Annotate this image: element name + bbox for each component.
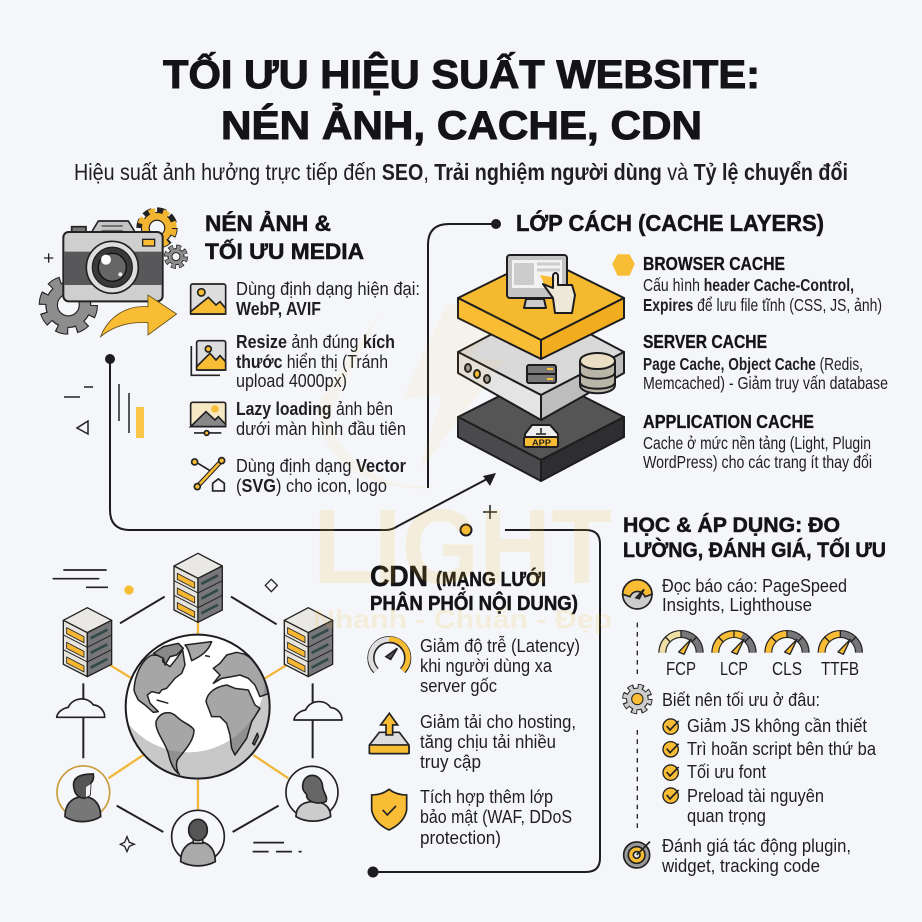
decorative marks: motion lines <box>64 384 144 438</box>
text: CDN list: khi người dùng xa <box>420 656 553 676</box>
title: NÉN ẢNH, CACHE, CDN <box>221 102 702 148</box>
text: CDN list: server gốc <box>420 676 497 696</box>
heading: learn and apply: HỌC & ÁP DỤNG: ĐO <box>623 512 840 537</box>
text: learn list: Giảm JS không cần thiết <box>687 716 867 736</box>
gear: small grey <box>166 246 186 267</box>
icon: target <box>624 842 650 868</box>
text: CDN list: bảo mật (WAF, DDoS <box>420 807 572 827</box>
text: media list <box>236 279 420 496</box>
heading: learn and apply <box>623 512 886 562</box>
layer: application <box>458 375 624 481</box>
gauges <box>662 630 859 654</box>
users <box>57 766 338 866</box>
text: media list: Lazy loading ảnh bên <box>236 399 393 419</box>
title <box>163 51 760 148</box>
text: media list: WebP, AVIF <box>236 299 321 319</box>
text: cache layers: Cache ở mức nền tảng (Light, Plugin <box>643 433 871 453</box>
text: media list: upload 4000px) <box>236 371 347 391</box>
panel: CDN icons <box>369 639 409 830</box>
heading: image compression: TỐI ƯU MEDIA <box>205 238 364 264</box>
chart: isometric cache stack <box>458 255 624 481</box>
text: media list: Dùng định dạng hiện đại: <box>236 279 420 299</box>
text: cache layers: SERVER CACHE <box>643 332 767 352</box>
text: CDN list: Giảm độ trễ (Latency) <box>420 635 580 656</box>
heading: CDN: PHÂN PHỐI NỘI DUNG) <box>370 591 578 615</box>
text: learn list: FCP <box>666 659 696 679</box>
text: cache layers: APPLICATION CACHE <box>643 412 814 432</box>
gear: yellow <box>139 210 175 246</box>
text: cache layers: Cấu hình header Cache-Control, <box>643 275 854 295</box>
diagram: CDN network <box>53 553 342 866</box>
heading: image compression: NÉN ẢNH & <box>205 211 331 236</box>
text: CDN list <box>420 635 580 848</box>
checks <box>663 719 679 803</box>
text: learn list <box>661 576 877 876</box>
layer: server <box>458 308 624 420</box>
text: media list: dưới màn hình đầu tiên <box>236 419 406 439</box>
text: learn list: Tối ưu font <box>687 762 766 782</box>
network links <box>83 597 313 832</box>
text: cache layers: WordPress) cho các trang ít thay đổi <box>643 452 872 472</box>
layer: application: APP <box>532 438 552 448</box>
text: learn list: Preload tài nguyên <box>687 786 824 806</box>
text: learn list: widget, tracking code <box>661 856 820 876</box>
text: learn list: Đọc báo cáo: PageSpeed <box>662 576 847 596</box>
text: learn list: Đánh giá tác động plugin, <box>662 836 851 856</box>
text: learn list: CLS <box>772 659 802 679</box>
connector lines <box>110 224 600 872</box>
text: learn list: Trì hoãn script bên thứ ba <box>687 739 877 759</box>
text: CDN list: truy cập <box>420 752 481 772</box>
title: TỐI ƯU HIỆU SUẤT WEBSITE: <box>163 51 760 97</box>
gear: large grey <box>43 280 94 330</box>
layer: browser <box>458 255 624 359</box>
decorations <box>53 570 302 852</box>
connector dots and arrow <box>105 219 501 878</box>
text: media list: thước hiển thị (Tránh <box>236 352 388 372</box>
icon: camera with gears <box>43 210 186 337</box>
text: learn list: quan trọng <box>687 806 766 826</box>
text: CDN list: Giảm tải cho hosting, <box>420 712 576 732</box>
icon: gear <box>625 686 650 712</box>
text: media list: (SVG) cho icon, logo <box>236 476 387 496</box>
subtitle: Hiệu suất ảnh hưởng trực tiếp đến SEO, Trải nghiệm người dùng và Tỷ lệ chuyển đổi <box>74 159 848 185</box>
heading: CDN: CDN <box>370 561 428 593</box>
server racks <box>63 553 333 677</box>
clouds <box>57 699 342 720</box>
watermark <box>313 303 612 634</box>
text: CDN list: tăng chịu tải nhiều <box>420 732 556 752</box>
panel: learn icons and gauges <box>623 580 859 868</box>
heading: CDN: (MẠNG LƯỚI <box>436 567 546 591</box>
globe <box>124 634 271 780</box>
text: learn list: Biết nên tối ưu ở đâu: <box>662 690 820 710</box>
watermark: Nhanh - Chuẩn - Đẹp <box>313 604 612 634</box>
text: learn list: TTFB <box>821 659 859 679</box>
text: cache layers: BROWSER CACHE <box>643 254 785 274</box>
heading: image compression <box>205 211 364 264</box>
text: media list: Dùng định dạng Vector <box>236 456 406 476</box>
text: media list: Resize ảnh đúng kích <box>236 332 395 352</box>
icon: report gauge <box>623 580 652 609</box>
text: cache layers <box>643 254 888 472</box>
text: learn list: Insights, Lighthouse <box>662 595 812 615</box>
text: learn list: LCP <box>720 659 748 679</box>
heading: CDN <box>370 561 578 615</box>
watermark: LIGHT <box>313 488 612 606</box>
heading: learn and apply: LƯỜNG, ĐÁNH GIÁ, TỐI ƯU <box>623 536 886 562</box>
icon: hexagon bullet <box>613 255 634 275</box>
panel: media list icons <box>191 284 226 491</box>
text: CDN list: protection) <box>420 828 501 848</box>
text: CDN list: Tích hợp thêm lớp <box>420 787 553 807</box>
text: cache layers: Page Cache, Object Cache (Redis, <box>643 354 863 374</box>
heading: cache layers: LỚP CÁCH (CACHE LAYERS) <box>516 209 824 236</box>
